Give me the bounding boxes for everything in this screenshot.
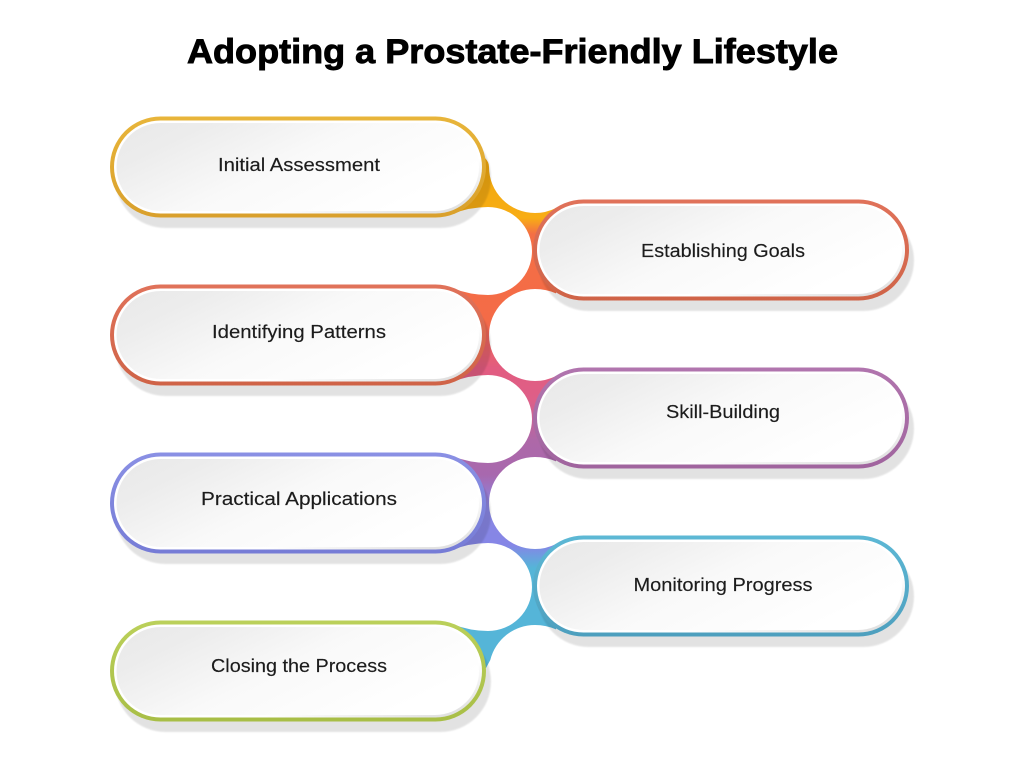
step: Monitoring Progress [533,536,914,647]
step: Skill-Building [533,368,914,479]
step: Identifying Patterns: Identifying Patterns [212,322,386,342]
step: Closing the Process: Closing the Process [211,656,387,676]
step: Identifying Patterns [110,284,491,396]
step: Monitoring Progress: Monitoring Progress [634,575,812,595]
step: Establishing Goals: Establishing Goals [641,241,805,261]
step: Establishing Goals [533,200,914,311]
step: Initial Assessment [110,116,491,228]
step: Practical Applications: Practical Applications [201,489,397,509]
step: Skill-Building: Skill-Building [666,402,780,422]
step: Closing the Process [110,620,491,732]
step: Initial Assessment: Initial Assessment [218,155,380,175]
title: Adopting a Prostate-Friendly Lifestyle [187,33,838,71]
step: Practical Applications [110,452,491,564]
connector: flowing ribbon linking the steps [440,158,560,671]
